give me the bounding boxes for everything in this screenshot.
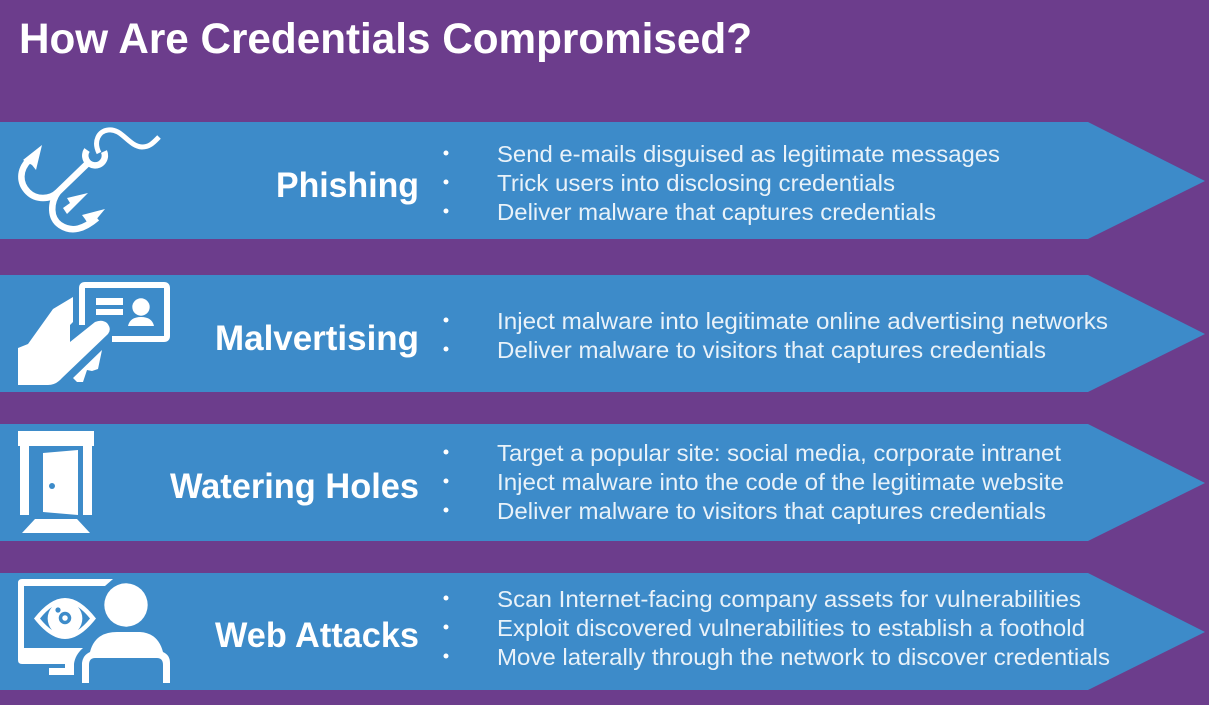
bullet list: watering holes: Inject malware into the code of the legitimate website [497,469,1064,495]
bullet list: web attacks: Exploit discovered vulnerabilities to establish a foothold [497,615,1085,641]
heading: malvertising: Malvertising [215,319,419,358]
panel: watering holes [0,424,1205,541]
bullet list: watering holes [444,440,1064,524]
arrow banner: web attacks [0,573,1205,690]
bullet list: malvertising: Deliver malware to visitors that captures credentials [497,337,1046,363]
bullet list: web attacks [444,586,1110,670]
bullet list: web attacks: Move laterally through the network to discover credentials [497,644,1110,670]
bullet list: watering holes: Deliver malware to visitors that captures credentials [497,498,1046,524]
heading: web attacks: Web Attacks [215,616,419,655]
title: How Are Credentials Compromised? [19,15,752,63]
icon: monitor with eye and person [18,579,170,683]
bullet list: malvertising [444,308,1108,363]
arrow banner: watering holes [0,424,1205,541]
bullet list: malvertising: Inject malware into legitimate online advertising networks [497,308,1108,334]
panel: phishing [0,122,1205,239]
panel: malvertising [0,275,1205,392]
arrow banner: phishing [0,122,1205,239]
bullet list: watering holes: Target a popular site: social media, corporate intranet [497,440,1061,466]
heading: phishing: Phishing [276,166,419,205]
icon: fish hook [21,130,159,229]
bullet list: web attacks: Scan Internet-facing company assets for vulnerabilities [497,586,1081,612]
bullet list: phishing: Deliver malware that captures credentials [497,199,936,225]
arrow banner: malvertising [0,275,1205,392]
icon: hand holding card [18,285,167,385]
panel: web attacks [0,573,1205,690]
icon: open door [18,431,94,533]
bullet list: phishing [444,141,1000,225]
bullet list: phishing: Send e-mails disguised as legitimate messages [497,141,1000,167]
heading: watering holes: Watering Holes [170,467,419,506]
bullet list: phishing: Trick users into disclosing credentials [497,170,895,196]
